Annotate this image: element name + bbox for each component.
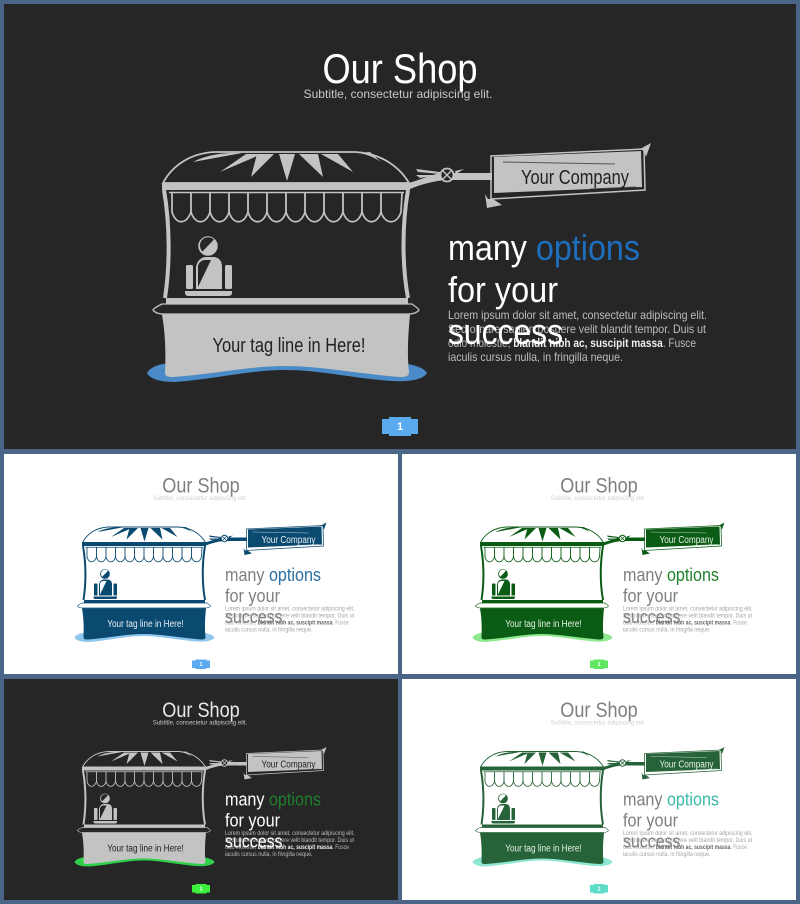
slide number badge: [590, 660, 608, 669]
subtitle: Subtitle, consectetur adipiscing elit.: [551, 720, 646, 726]
banner label: Your Company: [660, 760, 714, 770]
tag line: Your tag line in Here!: [505, 844, 582, 854]
headline line three: success: [623, 832, 680, 852]
headline line three: success: [448, 311, 563, 352]
headline line three: success: [623, 607, 680, 627]
body text: iaculis cursus nulla, in fringilla neque.: [623, 628, 711, 634]
headline: many options: [225, 565, 321, 585]
subtitle: Subtitle, consectetur adipiscing elit.: [153, 720, 248, 726]
body text: odio molestie, blandit nibh ac, suscipit massa. Fusce: [623, 620, 748, 626]
body text: [225, 606, 355, 634]
banner label: Your Company: [262, 535, 316, 546]
subtitle: Subtitle, consectetur adipiscing elit.: [153, 496, 248, 502]
slide number badge: 1: [597, 662, 601, 668]
shop illustration: [147, 143, 651, 382]
subtitle: Subtitle, consectetur adipiscing elit.: [551, 496, 646, 502]
body text: odio molestie, blandit nibh ac, suscipit massa. Fusce: [225, 620, 350, 626]
body text: [623, 606, 753, 634]
title: Our Shop: [322, 45, 478, 92]
headline line two: for your: [225, 586, 280, 606]
headline: many options: [623, 565, 719, 585]
body text: Lorem ipsum dolor sit amet, consectetur adipiscing elit.: [225, 606, 355, 612]
shop illustration: [74, 522, 326, 642]
body text: Sed ornare sapien posuere velit blandit tempor. Duis ut: [623, 614, 752, 620]
slide number badge: [192, 884, 210, 894]
banner label: Your Company: [262, 760, 316, 770]
panel: green dark slide: [4, 679, 398, 900]
body text: iaculis cursus nulla, in fringilla neque.: [225, 628, 313, 634]
body text: iaculis cursus nulla, in fringilla neque.: [225, 852, 313, 858]
body text: Sed ornare sapien posuere velit blandit tempor. Duis ut: [225, 614, 354, 620]
title: Our Shop: [162, 699, 240, 722]
body text: Sed ornare sapien posuere velit blandit tempor. Duis ut: [225, 838, 354, 844]
panel: teal light slide: [402, 679, 796, 900]
headline: many options: [225, 790, 321, 810]
shop illustration: [472, 747, 724, 866]
body text: Sed ornare sapien posuere velit blandit tempor. Duis ut: [623, 838, 752, 844]
slide number badge: [192, 660, 210, 669]
tag line: Your tag line in Here!: [505, 619, 582, 630]
shop illustration: [74, 747, 326, 866]
body text: Lorem ipsum dolor sit amet, consectetur adipiscing elit.: [448, 308, 707, 322]
headline: many options: [623, 790, 719, 810]
slide number badge: 1: [199, 662, 203, 668]
body text: [448, 308, 707, 364]
title: Our Shop: [162, 474, 240, 498]
headline: many options: [448, 227, 640, 268]
slide number badge: 1: [397, 421, 403, 433]
panel: main dark slide: [4, 4, 796, 449]
headline line two: for your: [225, 810, 280, 830]
headline line two: for your: [623, 810, 678, 830]
headline line two: for your: [623, 586, 678, 606]
title: Our Shop: [560, 474, 638, 498]
title: Our Shop: [560, 699, 638, 722]
headline line three: success: [225, 607, 282, 627]
slide number badge: 1: [199, 886, 203, 892]
headline line two: for your: [448, 269, 558, 310]
slide number badge: [590, 884, 608, 894]
body text: Lorem ipsum dolor sit amet, consectetur adipiscing elit.: [623, 831, 753, 837]
body text: Lorem ipsum dolor sit amet, consectetur adipiscing elit.: [225, 831, 355, 837]
tag line: Your tag line in Here!: [107, 619, 184, 630]
body text: odio molestie, blandit nibh ac, suscipit massa. Fusce: [225, 845, 350, 851]
banner label: Your Company: [660, 535, 714, 546]
tag line: Your tag line in Here!: [107, 844, 184, 854]
subtitle: Subtitle, consectetur adipiscing elit.: [304, 87, 492, 101]
panel: blue light slide: [4, 454, 398, 674]
body text: Sed ornare sapien posuere velit blandit tempor. Duis ut: [448, 322, 707, 336]
tag line: Your tag line in Here!: [212, 335, 366, 357]
banner label: Your Company: [521, 167, 629, 189]
body text: iaculis cursus nulla, in fringilla neque.: [623, 852, 711, 858]
body text: [623, 831, 753, 858]
body text: odio molestie, blandit nibh ac, suscipit massa. Fusce: [623, 845, 748, 851]
body text: [225, 831, 355, 858]
panel: green light slide: [402, 454, 796, 674]
headline line three: success: [225, 832, 282, 852]
shop illustration: [472, 522, 724, 642]
slide number badge: [382, 417, 418, 436]
body text: iaculis cursus nulla, in fringilla neque.: [448, 350, 623, 364]
slide number badge: 1: [597, 886, 601, 892]
body text: Lorem ipsum dolor sit amet, consectetur adipiscing elit.: [623, 606, 753, 612]
body text: odio molestie, blandit nibh ac, suscipit massa. Fusce: [448, 336, 696, 350]
